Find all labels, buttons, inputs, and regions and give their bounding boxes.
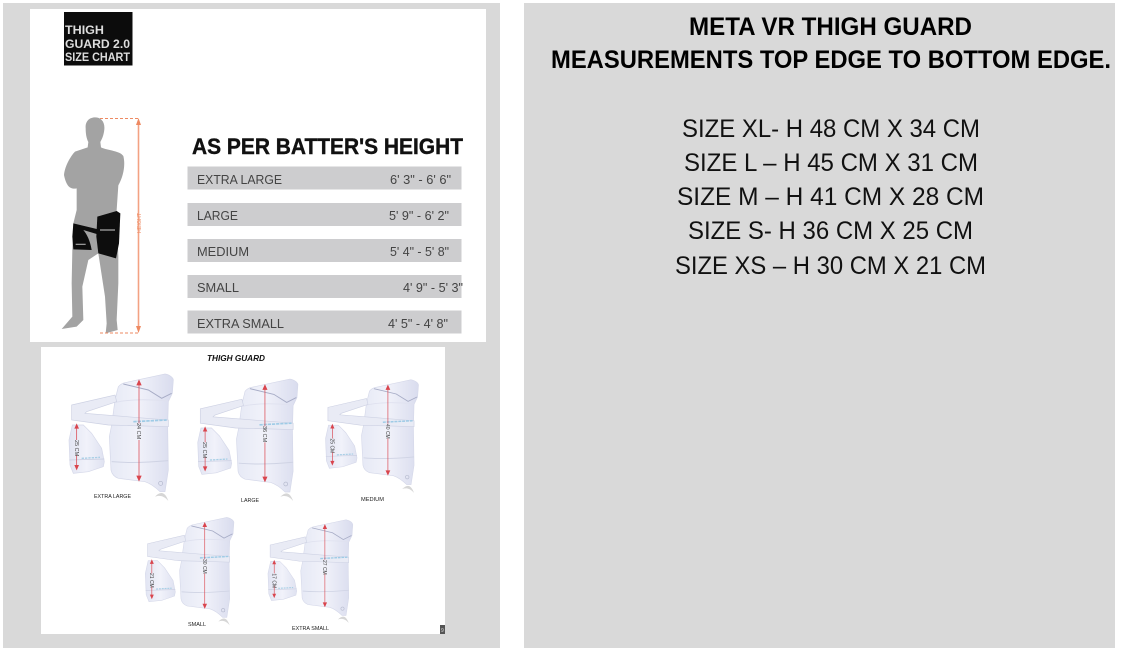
measurement: XS: SIZE XS – H 30 CM X 21 CM	[675, 252, 986, 280]
guard: large	[198, 379, 298, 504]
page number tab: 9	[441, 628, 444, 634]
panel: height size chart card	[30, 9, 486, 342]
chart title badge: SIZE CHART	[65, 50, 131, 64]
size row: medium: MEDIUM	[197, 244, 249, 259]
heading: as per batter's height: AS PER BATTER'S HEIGHT	[192, 134, 464, 159]
guard: medium: MEDIUM	[361, 497, 384, 503]
batter silhouette wearing thigh guard	[62, 117, 124, 333]
heading: product name: META VR THIGH GUARD	[689, 13, 972, 41]
size row: medium: 5' 4" - 5' 8"	[390, 244, 449, 259]
guard: large: LARGE	[241, 498, 259, 504]
guard: extra small: 27 CM	[321, 560, 327, 575]
guard: extra large	[69, 374, 173, 501]
guard: extra small: 17 CM	[270, 573, 276, 588]
size row: small	[188, 275, 463, 298]
measurement: S: SIZE S- H 36 CM X 25 CM	[688, 217, 973, 245]
guard: extra small: EXTRA SMALL	[292, 626, 330, 632]
guard: large: 25 CM	[201, 442, 207, 459]
height arrow with dashed guides	[100, 118, 143, 333]
guard: extra large: 25 CM	[73, 440, 79, 457]
guard: small: 30 CM	[201, 559, 207, 574]
guard: small: SMALL	[188, 622, 207, 628]
size row: extra small	[188, 310, 462, 334]
guard: extra large: EXTRA LARGE	[94, 494, 131, 500]
guard: small: 21 CM	[148, 573, 154, 588]
size row: extra large: EXTRA LARGE	[197, 172, 282, 187]
size row: extra small: EXTRA SMALL	[197, 316, 284, 331]
guard: medium	[326, 380, 419, 503]
diagram heading: THIGH GUARD	[207, 354, 265, 363]
panel: thigh guard diagrams card	[41, 347, 445, 634]
measurement: L: SIZE L – H 45 CM X 31 CM	[684, 149, 978, 177]
height arrow with dashed guides: HEIGHT	[137, 212, 143, 233]
size row: large: 5' 9" - 6' 2"	[389, 208, 449, 223]
panel: left grey background	[3, 3, 500, 648]
guard: medium: 40 CM	[384, 424, 390, 439]
size row: medium	[188, 239, 462, 262]
size row: extra large	[188, 166, 462, 190]
chart title badge: GUARD 2.0	[65, 37, 130, 51]
heading: measurement note: MEASUREMENTS TOP EDGE TO BOTTOM EDGE.	[551, 46, 1111, 74]
guard: extra large: 24 CM	[135, 423, 141, 440]
chart title badge: THIGH	[65, 23, 104, 37]
size row: extra large: 6' 3" - 6' 6"	[390, 172, 451, 187]
size row: extra small: 4' 5" - 4' 8"	[388, 316, 448, 331]
guard: medium: 25 CM	[328, 438, 334, 453]
panel: measurements	[524, 3, 1115, 648]
guard: small	[145, 517, 234, 628]
size row: small: 4' 9" - 5' 3"	[403, 280, 463, 295]
measurement: XL: SIZE XL- H 48 CM X 34 CM	[682, 115, 980, 143]
size row: large: LARGE	[197, 208, 238, 223]
size row: large	[188, 203, 462, 226]
guard: extra small	[268, 520, 353, 632]
chart title badge	[64, 12, 132, 66]
page number tab	[440, 625, 445, 634]
measurement: M: SIZE M – H 41 CM X 28 CM	[677, 183, 984, 211]
guard: large: 36 CM	[261, 426, 267, 443]
size row: small: SMALL	[197, 280, 239, 295]
